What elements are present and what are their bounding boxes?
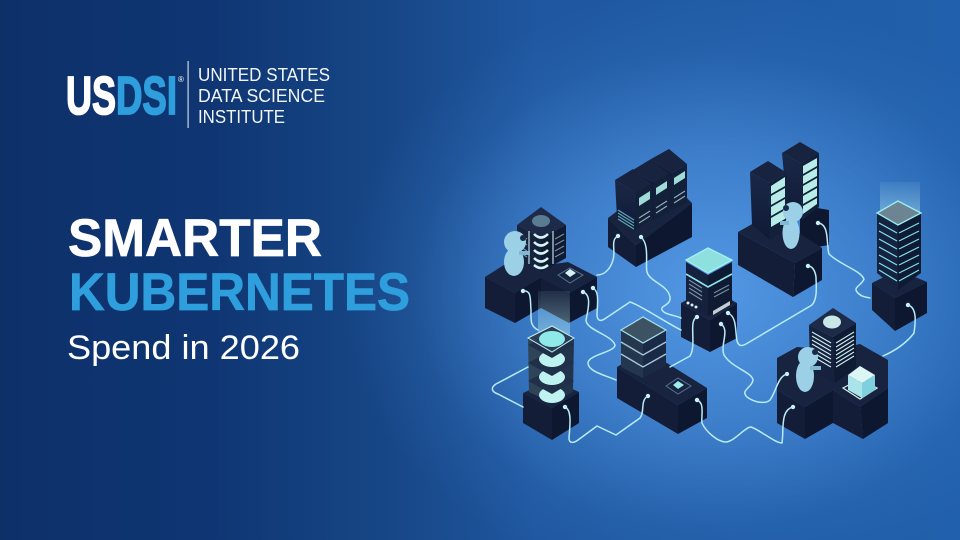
plugs [806,220,820,268]
server [809,308,856,383]
cluster: three servers on base [608,149,692,267]
cluster: layered stack on long base [617,317,707,434]
cluster: two tall racks with robot [738,142,829,297]
robot [504,231,530,276]
cluster: robot and server on twin base [485,207,597,323]
chip [558,268,583,283]
rack 1 [750,161,787,240]
logo divider [188,61,189,128]
base block [523,380,579,440]
logo wordmark: INSTITUTE [198,107,285,127]
logo mark: USDSI: ® [178,75,184,84]
base block [608,176,692,267]
plugs [616,234,644,240]
logo [66,61,330,128]
robot [796,347,821,392]
logo wordmark: DATA SCIENCE [198,86,325,106]
rack 2 [782,142,819,220]
base blocks [777,344,888,439]
plugs [784,372,796,410]
plug [562,404,568,410]
server 1 [615,169,652,230]
hologram [538,291,570,345]
base block [617,350,707,434]
base block [681,288,737,352]
crystal cube [843,366,877,399]
logo mark: USDSI [66,66,184,126]
storage stack [528,326,574,403]
cluster: glowing tower [872,182,927,331]
base block [872,270,927,331]
chip [666,378,691,394]
logo wordmark [198,65,330,127]
subheading: Spend in 2026 [67,329,300,367]
plugs [694,310,730,326]
headline [67,209,410,367]
cluster: centre server [681,248,737,352]
cluster: cylinder stack [523,291,579,440]
logo mark: USDSI: DSI [116,66,177,126]
base blocks [485,258,597,323]
server [686,248,732,316]
cable network [492,223,915,443]
stack [621,317,666,378]
tower [877,201,921,290]
logo wordmark: UNITED STATES [198,65,330,85]
headline: KUBERNETES: KUBERNETES [69,263,410,322]
plugs [520,286,596,294]
server 3 [651,149,687,210]
base block [738,205,829,297]
plug [906,302,910,308]
robot [780,202,803,249]
plugs [646,394,700,402]
server tower [517,207,566,272]
illustration: isometric data center [485,142,927,443]
hologram [880,182,920,224]
cluster: robot, server and crystal [777,308,888,439]
logo mark: USDSI: US [66,66,116,126]
headline: SMARTER: SMARTER [68,209,322,268]
server 2 [633,159,669,220]
